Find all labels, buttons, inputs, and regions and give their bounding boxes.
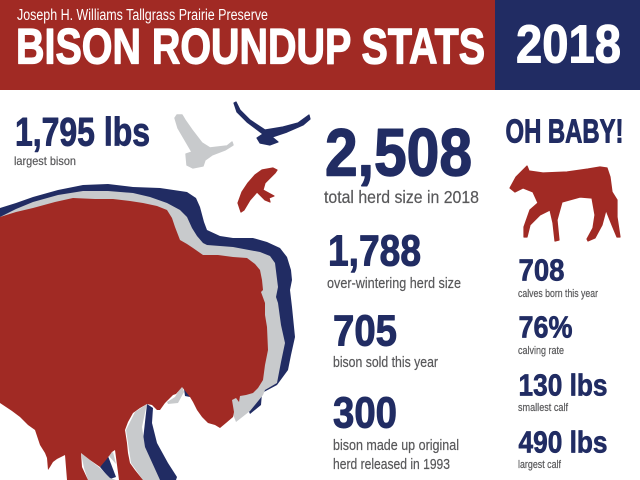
bison silhouette — [0, 184, 295, 480]
subtitle: Joseph H. Williams Tallgrass Prairie Preserve — [17, 7, 268, 24]
title: BISON ROUNDUP STATS — [16, 18, 485, 74]
stat: smallest calf — [518, 368, 608, 414]
navy bison layer — [0, 184, 295, 480]
stat: over-wintering herd size: 1,788 — [328, 226, 421, 276]
icon: gray bird — [175, 115, 233, 168]
icon: red bird — [238, 168, 277, 212]
stat: calving rate: calving rate — [518, 345, 564, 357]
stat: largest bison — [14, 110, 150, 168]
stat: largest calf — [518, 424, 608, 471]
stat: total herd size: total herd size in 2018 — [324, 187, 479, 207]
red bison layer — [0, 198, 268, 480]
stat: bison sold: bison sold this year — [333, 355, 438, 371]
stat: over-wintering herd size: over-wintering herd size — [327, 276, 461, 292]
stat: largest calf: largest calf — [518, 459, 562, 471]
stat: bison sold — [333, 306, 438, 371]
icon: navy bird — [234, 102, 310, 145]
stat: calving rate — [518, 310, 572, 357]
stat: calves born: calves born this year — [518, 288, 598, 300]
stat: calves born: 708 — [518, 252, 564, 288]
stat: smallest calf: 130 lbs — [518, 368, 608, 402]
stat: smallest calf: smallest calf — [518, 402, 569, 414]
header banner — [0, 0, 640, 90]
stat: largest bison: 1,795 lbs — [15, 110, 150, 154]
stat: total herd size: 2,508 — [325, 116, 472, 190]
stat: original herd: herd released in 1993 — [333, 457, 450, 473]
icon: calf — [510, 166, 620, 241]
stat: calving rate: 76% — [518, 310, 572, 344]
gray bison layer — [0, 191, 285, 480]
stat: original herd — [333, 388, 459, 473]
stat: bison sold: 705 — [333, 306, 397, 356]
year: 2018 — [516, 14, 621, 74]
stat: original herd: 300 — [333, 388, 397, 438]
stat: calves born — [518, 252, 598, 300]
stat: largest bison: largest bison — [14, 154, 76, 168]
stat: largest calf: 490 lbs — [518, 424, 608, 460]
stat: original herd: bison made up original — [333, 438, 459, 454]
stat: over-wintering herd size — [327, 226, 461, 292]
